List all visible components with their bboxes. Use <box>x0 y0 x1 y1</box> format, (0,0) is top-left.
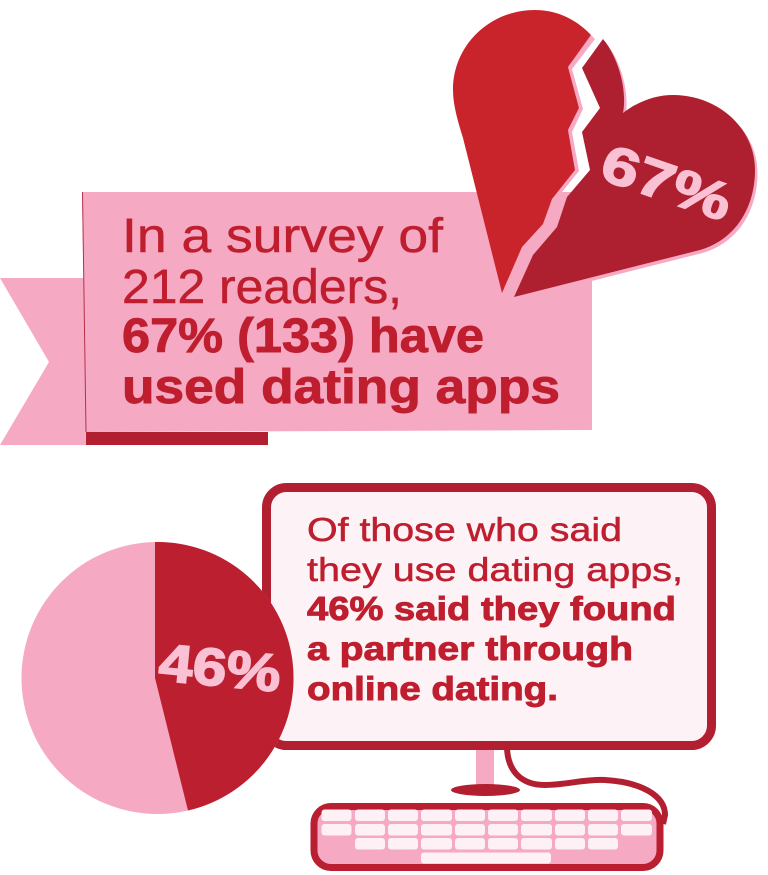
panel: ribbon banner <box>0 192 592 445</box>
pie: 46% slice <box>155 542 294 811</box>
icon: computer <box>266 488 712 868</box>
keyboard keys <box>322 810 652 864</box>
monitor text: a partner through <box>307 630 633 667</box>
ribbon main panel <box>82 192 592 432</box>
monitor text <box>307 511 683 707</box>
monitor text: they use dating apps, <box>307 551 683 588</box>
survey text: 67% (133) have <box>122 310 484 363</box>
monitor text: Of those who said <box>307 511 622 548</box>
heart percentage: 67% <box>594 134 739 233</box>
heart right shadow <box>516 42 758 300</box>
survey text: used dating apps <box>122 361 560 414</box>
icon: broken heart <box>453 10 758 300</box>
heart left shadow <box>552 35 595 192</box>
ribbon tail <box>0 278 86 445</box>
pie: remainder <box>22 542 294 814</box>
monitor text: online dating. <box>307 670 558 707</box>
heart right half <box>514 39 755 297</box>
survey text: 212 readers, <box>122 261 402 314</box>
keyboard body <box>314 806 660 868</box>
heart left half <box>453 10 591 293</box>
monitor base <box>451 784 520 796</box>
monitor screen <box>266 488 712 746</box>
heart gap <box>557 35 604 192</box>
monitor stand <box>476 750 494 786</box>
monitor text: 46% said they found <box>307 590 676 627</box>
survey text: In a survey of <box>122 210 444 263</box>
survey text <box>122 210 560 414</box>
pie chart <box>22 542 294 814</box>
pie percentage: 46% <box>156 633 283 704</box>
keyboard cable <box>507 748 665 824</box>
ribbon dark fold <box>86 432 268 445</box>
